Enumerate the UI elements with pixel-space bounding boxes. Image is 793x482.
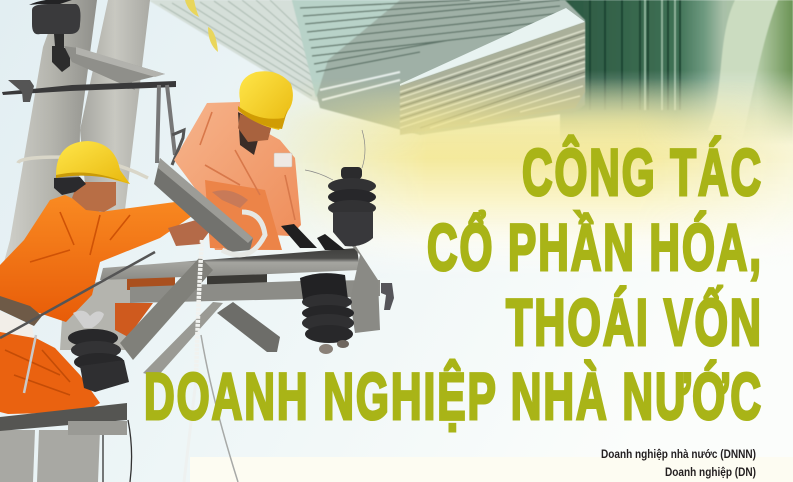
main paper stack	[292, 0, 585, 135]
front pole	[4, 0, 97, 262]
rust shadow between beams	[127, 276, 175, 290]
main diagonal beam	[154, 158, 253, 252]
sheds	[68, 329, 118, 347]
top insulator	[32, 4, 80, 34]
yellow hard hat	[56, 141, 130, 184]
insulator cap	[29, 0, 72, 5]
body folds	[30, 212, 130, 262]
right brace	[217, 302, 280, 352]
legend line 1: Doanh nghiệp nhà nước (DNNN)	[601, 447, 756, 461]
left plate	[8, 80, 34, 102]
horizontal bolt	[2, 81, 176, 95]
hand	[168, 220, 212, 246]
insulator: upper right	[281, 167, 376, 250]
EVN badge	[274, 153, 292, 167]
wing nut	[73, 311, 104, 328]
top insulator and cross-arm	[2, 0, 184, 165]
safety belt	[0, 296, 42, 326]
insulator: lower right	[300, 273, 354, 354]
bracket	[172, 130, 184, 165]
body	[333, 212, 373, 246]
face	[72, 182, 116, 212]
steel structure	[0, 158, 394, 482]
upper body	[0, 195, 192, 322]
white cover sheet	[400, 8, 585, 86]
torso	[174, 102, 301, 250]
trouser folds	[5, 350, 70, 395]
lower horizontal beam	[130, 280, 380, 303]
yellow banknote edges	[185, 0, 218, 52]
title	[144, 135, 763, 433]
end gusset	[333, 222, 380, 333]
base	[80, 360, 129, 392]
abbreviations legend	[601, 447, 756, 479]
thin wire	[305, 130, 365, 180]
sheds	[328, 178, 376, 194]
bottom cables	[103, 420, 132, 482]
worker in salmon uniform	[174, 71, 301, 250]
insulator stem	[52, 34, 70, 72]
rust orange behind struts	[115, 303, 153, 337]
platform clamp	[68, 421, 127, 435]
second strut	[143, 302, 223, 377]
money stacks photo	[148, 0, 793, 150]
trousers	[0, 327, 100, 414]
arm folds	[200, 112, 295, 220]
hanging rope	[196, 240, 202, 380]
diagonal strut	[120, 257, 213, 360]
green banknote bundles	[560, 0, 793, 150]
hanging rods	[157, 85, 175, 163]
cross-arm	[64, 46, 165, 90]
cross-arm top edge	[76, 47, 165, 77]
metal clip	[24, 335, 36, 393]
rope loop	[222, 212, 265, 255]
legend line 2: Doanh nghiệp (DN)	[665, 465, 756, 479]
diagonal beam highlight	[158, 158, 253, 243]
clamp	[381, 283, 394, 310]
neck shadow	[238, 112, 262, 155]
terminals	[319, 344, 333, 354]
yellow hard hat	[238, 71, 293, 130]
back pole	[80, 0, 150, 240]
yellow fade over photo	[270, 81, 793, 246]
cream bottom band	[190, 457, 793, 482]
upper horizontal beam	[100, 248, 360, 280]
lower jacket	[205, 180, 282, 250]
top cap	[341, 167, 362, 179]
worker in orange uniform	[0, 141, 212, 414]
top body	[300, 273, 348, 300]
diagonal cable	[0, 252, 155, 338]
front stack	[400, 22, 585, 135]
bottom platform	[0, 403, 127, 431]
fading rope	[184, 380, 196, 482]
rope around pole	[18, 157, 148, 178]
white sash	[0, 311, 34, 338]
base clamps	[281, 224, 345, 250]
hand on beam	[212, 190, 248, 208]
pale back pages	[148, 0, 338, 108]
hat shading	[56, 172, 130, 184]
insulator: lower left	[68, 311, 129, 392]
face	[238, 114, 272, 142]
coiled rope	[0, 212, 265, 482]
steel plate behind worker	[60, 276, 130, 350]
tool shadow	[207, 274, 267, 288]
utility poles	[0, 0, 150, 482]
hair	[54, 177, 86, 195]
grey cable	[201, 335, 238, 482]
lower pole	[0, 430, 100, 482]
hat brim	[238, 106, 288, 129]
sheds	[302, 294, 352, 310]
